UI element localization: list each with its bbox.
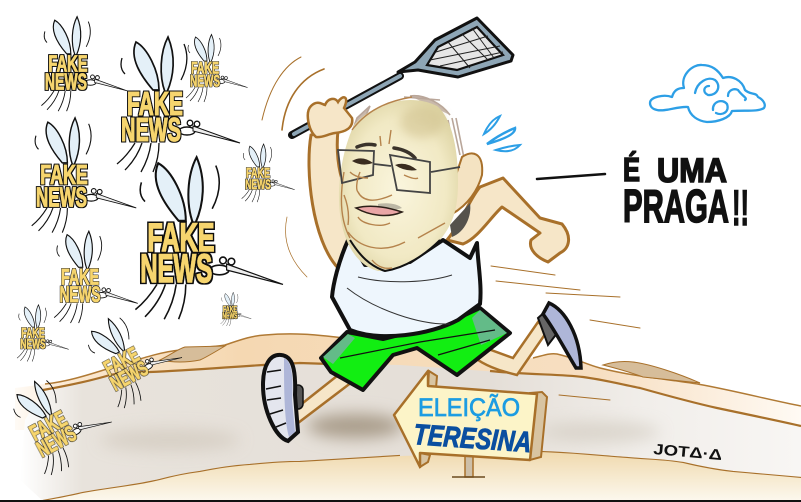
hill outlines (45, 334, 801, 406)
bottom border (0, 500, 801, 502)
right arm (447, 178, 569, 262)
ear (452, 153, 482, 214)
shorts (321, 308, 510, 390)
mosquito 2: NEWS (121, 111, 181, 148)
mosquito 1 (41, 17, 128, 111)
raised arm (309, 130, 350, 268)
arrow board (394, 371, 537, 467)
cloud icon (650, 65, 765, 122)
mosquito 3: NEWS (190, 72, 220, 90)
mosquito 1: FAKE (48, 50, 88, 76)
mosquito 4: FAKE (40, 159, 88, 190)
speech text: É (623, 151, 640, 188)
mosquito 7: FAKE (61, 264, 99, 289)
mosquito 10: NEWS (106, 356, 152, 396)
signature: JOTΔ·Δ (653, 441, 723, 464)
mosquito 8: FAKE (21, 325, 45, 341)
runner character (263, 18, 581, 441)
mosquito 8: NEWS (20, 335, 46, 352)
sign text top: ELEIÇÃO (418, 393, 520, 422)
face (339, 100, 458, 271)
fist on racket (308, 97, 352, 137)
sweat drops (484, 116, 520, 151)
sign text bottom: TERESINA (413, 419, 532, 459)
mosquito 7 (54, 231, 138, 323)
mosquito 7: NEWS (60, 282, 100, 307)
mosquito 1: NEWS (45, 69, 87, 94)
jaw outline (350, 240, 440, 271)
mosquito 9: NEWS (222, 311, 238, 320)
road edge lines (43, 363, 801, 501)
mosquito 11: FAKE (25, 406, 71, 446)
back hair (450, 203, 470, 237)
mosquito 6: NEWS (245, 177, 271, 193)
mustache and mouth (378, 203, 402, 209)
direction sign (394, 371, 547, 477)
glasses (338, 150, 460, 193)
speech text: !! (732, 180, 749, 236)
front leg and shoe (478, 303, 581, 375)
mosquito 8 (17, 305, 69, 362)
motion lines (262, 57, 640, 400)
racket (292, 18, 513, 135)
hill brown patches (160, 346, 700, 383)
road shadow right (540, 422, 660, 442)
mosquito 4: NEWS (36, 181, 87, 212)
lips (356, 206, 402, 215)
speech text: PRAGA (623, 180, 729, 232)
grey road band (20, 363, 801, 501)
arrow board side (420, 371, 547, 467)
eyes (352, 158, 417, 170)
speech text (623, 151, 749, 236)
mosquito 9 (220, 292, 251, 326)
speech dash (537, 174, 605, 179)
white tank top (332, 238, 481, 336)
back leg and shoe (263, 355, 352, 441)
mosquito 5: FAKE (147, 216, 215, 260)
mosquito 9: FAKE (223, 305, 237, 314)
mosquito 6: FAKE (246, 166, 270, 182)
mosquito 10: FAKE (100, 342, 143, 380)
mosquito swarm (4, 17, 295, 479)
mosquito 3: FAKE (191, 60, 219, 78)
mosquito 10 (79, 297, 191, 412)
mosquito 2 (117, 37, 240, 172)
foreground sand (43, 452, 801, 501)
speech text: UMA (657, 152, 727, 190)
mosquito 2: FAKE (127, 85, 183, 122)
road shadows (307, 414, 403, 438)
eyebrows (357, 144, 415, 158)
desert ground (0, 334, 801, 502)
sign post (452, 455, 485, 477)
skull outline (342, 97, 412, 238)
head (338, 96, 482, 271)
mosquito 6 (242, 144, 295, 202)
nose and wrinkles (344, 130, 445, 268)
mosquito 3 (186, 34, 248, 102)
forehead shading (400, 106, 444, 138)
road shadow middle (100, 429, 240, 451)
mosquito 11: NEWS (33, 421, 80, 462)
mosquito 4 (32, 118, 136, 233)
mosquito 5 (135, 157, 283, 319)
far hills (15, 334, 801, 430)
mosquito 5: NEWS (140, 247, 212, 291)
hair (352, 96, 464, 160)
mosquito 11 (4, 358, 121, 479)
